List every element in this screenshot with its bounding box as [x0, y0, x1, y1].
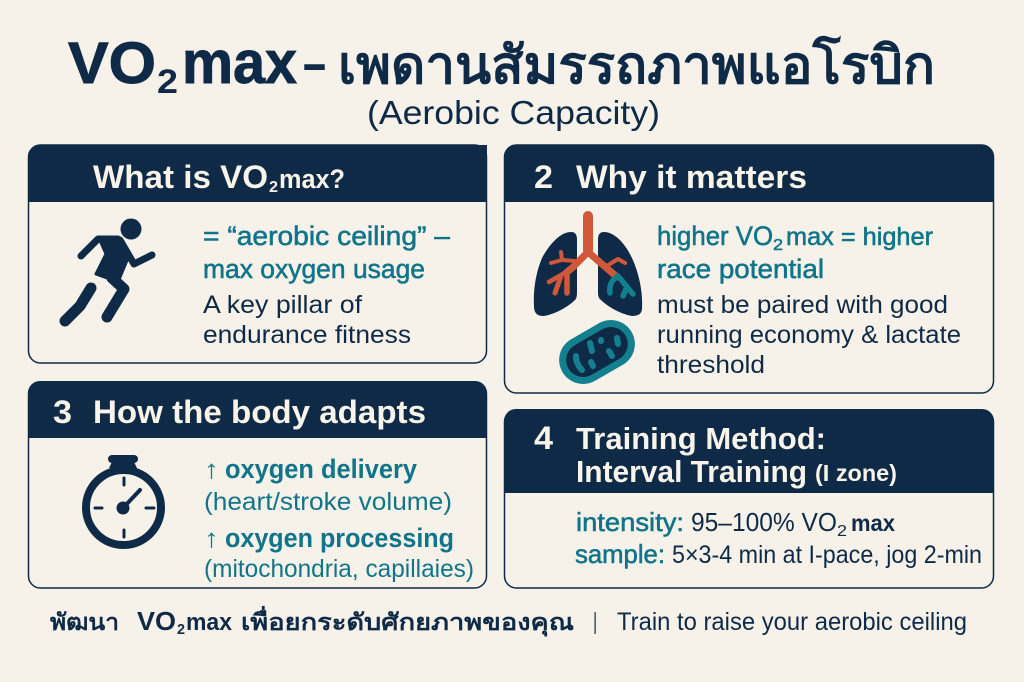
panel: what is VO2max [28, 145, 487, 363]
text: key pillar [203, 291, 411, 349]
heading: why it matters: Why it matters [576, 159, 807, 195]
text: higher VO2max [657, 221, 933, 284]
text: higher VO2max: 2 [773, 237, 783, 254]
heading: training method: 4 [534, 420, 553, 456]
text: sample session [575, 539, 982, 569]
title: max [182, 29, 297, 96]
text: oxygen processing: (mitochondria, capillaies) [204, 555, 474, 583]
heading: what is VO2max: 2 [269, 179, 278, 196]
text: intensity: 95–100% VO [691, 507, 837, 537]
icon: runner [65, 218, 152, 321]
text: oxygen processing [204, 523, 474, 583]
text: sample session: sample: [575, 539, 665, 569]
heading: training method: Training Method: [576, 421, 826, 456]
panel: training method [504, 409, 994, 588]
panel: why it matters [504, 145, 994, 393]
text: oxygen processing: ↑ [204, 523, 219, 553]
text: intensity [576, 507, 895, 540]
panel: how the body adapts [28, 381, 487, 588]
heading: why it matters: 2 [534, 159, 553, 195]
text: oxygen delivery: ↑ [204, 454, 219, 484]
title: เพดานสัมรรถภาพแอโรบิก [338, 34, 935, 95]
title: VO [68, 31, 156, 96]
text: paired with economy: must be paired with good [657, 291, 948, 319]
footer: English slogan: Train to raise your aerobic ceiling [617, 608, 967, 636]
text: intensity: max [851, 510, 895, 536]
text: paired with economy: running economy & lactate [657, 321, 961, 349]
text: intensity: 2 [837, 523, 847, 540]
text: higher VO2max: max = higher [786, 223, 933, 251]
text: aerobic ceiling definition [203, 221, 450, 284]
heading: what is VO2max [93, 159, 345, 196]
header bar: why it matters [504, 145, 994, 202]
text: oxygen delivery: (heart/stroke volume) [204, 488, 452, 516]
subtitle: (Aerobic Capacity) [367, 94, 660, 131]
text: paired with economy [657, 291, 961, 379]
text: aerobic ceiling definition: max oxygen usage [203, 254, 425, 284]
text: oxygen delivery: oxygen delivery [225, 454, 417, 484]
text: higher VO2max: race potential [657, 254, 824, 284]
footer: Thai slogan: พัฒนา [50, 609, 119, 635]
header bar: what is VO2max [28, 145, 487, 202]
text: intensity: intensity: [576, 507, 684, 537]
text: oxygen processing: oxygen processing [225, 523, 454, 553]
icon: mitochondrion [550, 311, 644, 393]
footer: Thai slogan: max [186, 609, 233, 636]
footer: Thai slogan: เพื่อยกระดับศักยภาพของคุณ [241, 605, 574, 637]
title: – [303, 31, 326, 96]
icon: stopwatch [86, 455, 161, 545]
heading: how the body adapts: 3 [53, 394, 72, 430]
heading: training method [534, 420, 897, 489]
text: paired with economy: threshold [657, 351, 765, 379]
text: oxygen delivery [204, 454, 452, 516]
heading: how the body adapts: How the body adapts [93, 394, 426, 430]
icon: lungs [534, 216, 642, 316]
heading: training method: Interval Training [576, 454, 807, 489]
heading: what is VO2max: What is VO [93, 159, 268, 195]
footer: Thai slogan [50, 605, 574, 638]
title: 2 [157, 63, 178, 101]
title [68, 29, 935, 101]
footer: Thai slogan: VO [137, 606, 176, 636]
header bar: how the body adapts [28, 381, 487, 438]
footer: Thai slogan: 2 [177, 621, 185, 638]
heading: training method: (I zone) [815, 460, 897, 486]
text: sample session: 5×3-4 min at I-pace, jog 2-min [672, 541, 982, 569]
header bar: training method [504, 409, 994, 493]
text: key pillar: A key pillar of [203, 291, 362, 319]
heading: what is VO2max: max? [279, 164, 345, 194]
text: key pillar: endurance fitness [203, 321, 411, 349]
text: higher VO2max: higher VO [657, 221, 773, 251]
text: aerobic ceiling definition: = “aerobic ceiling” – [203, 221, 450, 251]
